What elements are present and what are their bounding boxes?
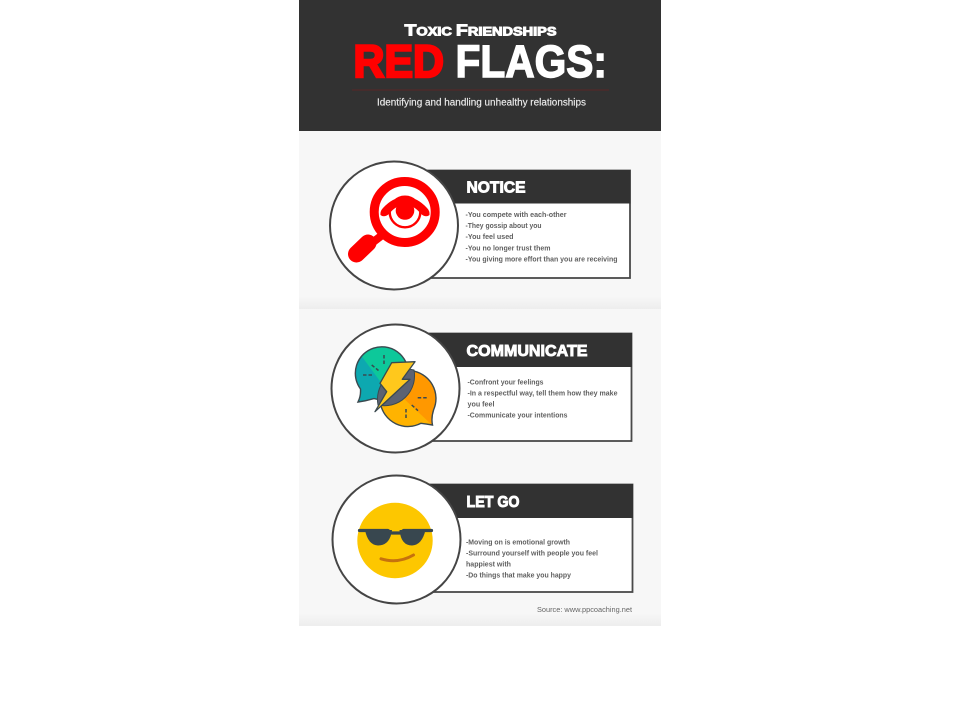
title: Red: RED <box>354 36 444 87</box>
panel: notice <box>330 162 630 290</box>
let go heading: LET GO <box>466 494 520 511</box>
red rule <box>352 90 609 91</box>
let go text: -Moving on is emotional growth <box>466 538 570 546</box>
notice text: -You giving more effort than you are receiving <box>466 254 618 264</box>
title: Toxic Friendships: TOXIC FRIENDSHIPS <box>404 22 557 40</box>
notice text: -You feel used <box>466 232 514 241</box>
notice heading bar <box>400 170 630 204</box>
icon: smiley with sunglasses <box>357 503 433 578</box>
notice text <box>466 210 618 264</box>
let go text: -Do things that make you happy <box>466 570 572 580</box>
communicate icon circle <box>332 324 460 452</box>
panel: let go <box>332 476 633 614</box>
communicate heading: COMMUNICATE <box>466 343 588 360</box>
let go heading bar <box>400 484 633 518</box>
let go text <box>466 538 598 580</box>
icon: speech bubbles with lightning <box>354 346 437 428</box>
title: Flags: FLAGS: <box>456 36 607 87</box>
bottom shade <box>299 613 661 626</box>
communicate heading bar <box>400 333 632 367</box>
notice icon circle <box>330 162 458 290</box>
notice text: -You compete with each-other <box>466 210 567 219</box>
communicate text: -Communicate your intentions <box>468 410 568 420</box>
communicate text: -In a respectful way, tell them how they make <box>468 388 618 398</box>
notice heading: NOTICE <box>466 180 526 196</box>
icon: magnifying glass with eye <box>356 182 435 254</box>
communicate text: -Confront your feelings <box>468 378 544 386</box>
communicate text: you feel <box>468 400 494 408</box>
let go text: happiest with <box>466 560 511 568</box>
page background <box>299 131 661 626</box>
let go card <box>400 484 632 592</box>
source note: Source: www.ppcoaching.net <box>537 605 633 614</box>
header panel <box>299 0 661 131</box>
communicate card <box>400 334 632 441</box>
panel: communicate <box>332 324 632 452</box>
notice text: -They gossip about you <box>466 221 542 230</box>
notice text: -You no longer trust them <box>466 244 551 252</box>
let go text: -Surround yourself with people you feel <box>466 548 598 558</box>
let go icon circle <box>332 476 460 604</box>
subtitle: Identifying and handling unhealthy relationships <box>377 98 586 108</box>
notice card <box>400 170 630 278</box>
section divider shade <box>299 296 661 309</box>
communicate text <box>468 378 618 420</box>
